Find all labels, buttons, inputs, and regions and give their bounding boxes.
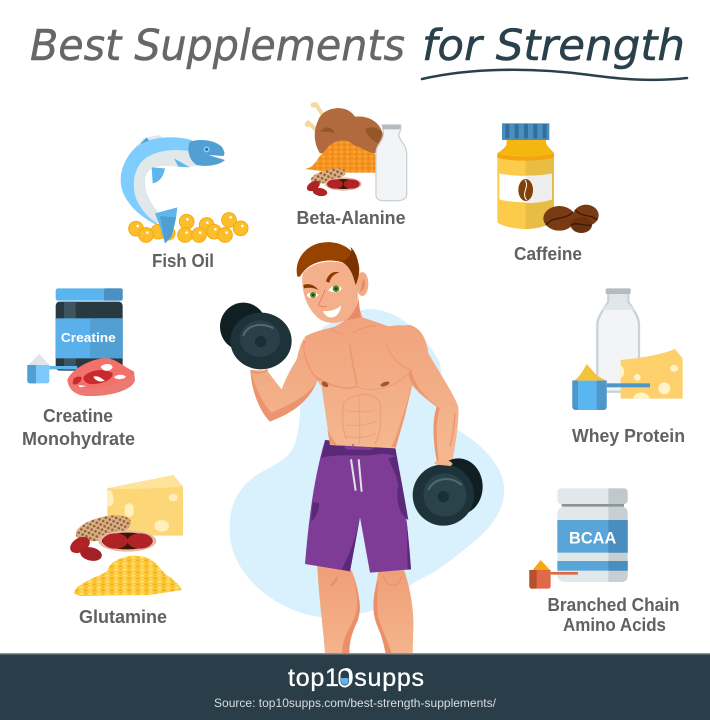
icon: creatine jar: Creatine <box>61 330 116 345</box>
head <box>297 242 368 323</box>
title: Best Supplements <box>30 21 405 71</box>
label: Branched Chain Amino Acids: Amino Acids <box>563 615 666 635</box>
source line: Source: top10supps.com/best-strength-supplements/ <box>214 696 497 710</box>
right arm <box>387 325 458 465</box>
icon: creatine jar <box>27 288 135 396</box>
label: Fish Oil: Fish Oil <box>152 251 214 271</box>
neck <box>330 305 392 333</box>
label: Creatine Monohydrate: Creatine <box>43 406 113 426</box>
icon: whey protein <box>572 288 683 410</box>
lower dumbbell <box>413 458 483 526</box>
label: Glutamine: Glutamine <box>79 607 167 627</box>
label: Creatine Monohydrate: Monohydrate <box>22 429 135 449</box>
icon: caffeine jar <box>497 123 599 233</box>
title <box>30 21 687 80</box>
label: Creatine Monohydrate <box>22 406 135 449</box>
muscle lines <box>318 326 410 443</box>
label: Branched Chain Amino Acids: Branched Chain <box>548 595 680 615</box>
shorts <box>305 440 411 573</box>
icon: BCAA jar <box>529 488 628 589</box>
upper dumbbell <box>220 303 292 373</box>
label: Beta-Alanine: Beta-Alanine <box>296 208 406 228</box>
left arm <box>251 337 317 422</box>
title: for Strength <box>422 21 685 71</box>
background blob <box>230 309 504 617</box>
label: Caffeine: Caffeine <box>514 244 582 264</box>
icon: BCAA jar: BCAA <box>569 529 617 547</box>
torso, arms and head <box>220 242 458 465</box>
footer <box>0 653 710 720</box>
torso <box>305 317 428 448</box>
label: Whey Protein: Whey Protein <box>572 426 685 446</box>
icon: fish oil <box>121 135 248 243</box>
legs and shorts <box>305 440 413 653</box>
icon: beta-alanine foods <box>305 102 407 201</box>
logo: top10supps <box>288 664 424 692</box>
man figure <box>220 242 483 653</box>
label: Branched Chain Amino Acids <box>548 595 680 635</box>
icon: glutamine foods <box>67 475 183 596</box>
